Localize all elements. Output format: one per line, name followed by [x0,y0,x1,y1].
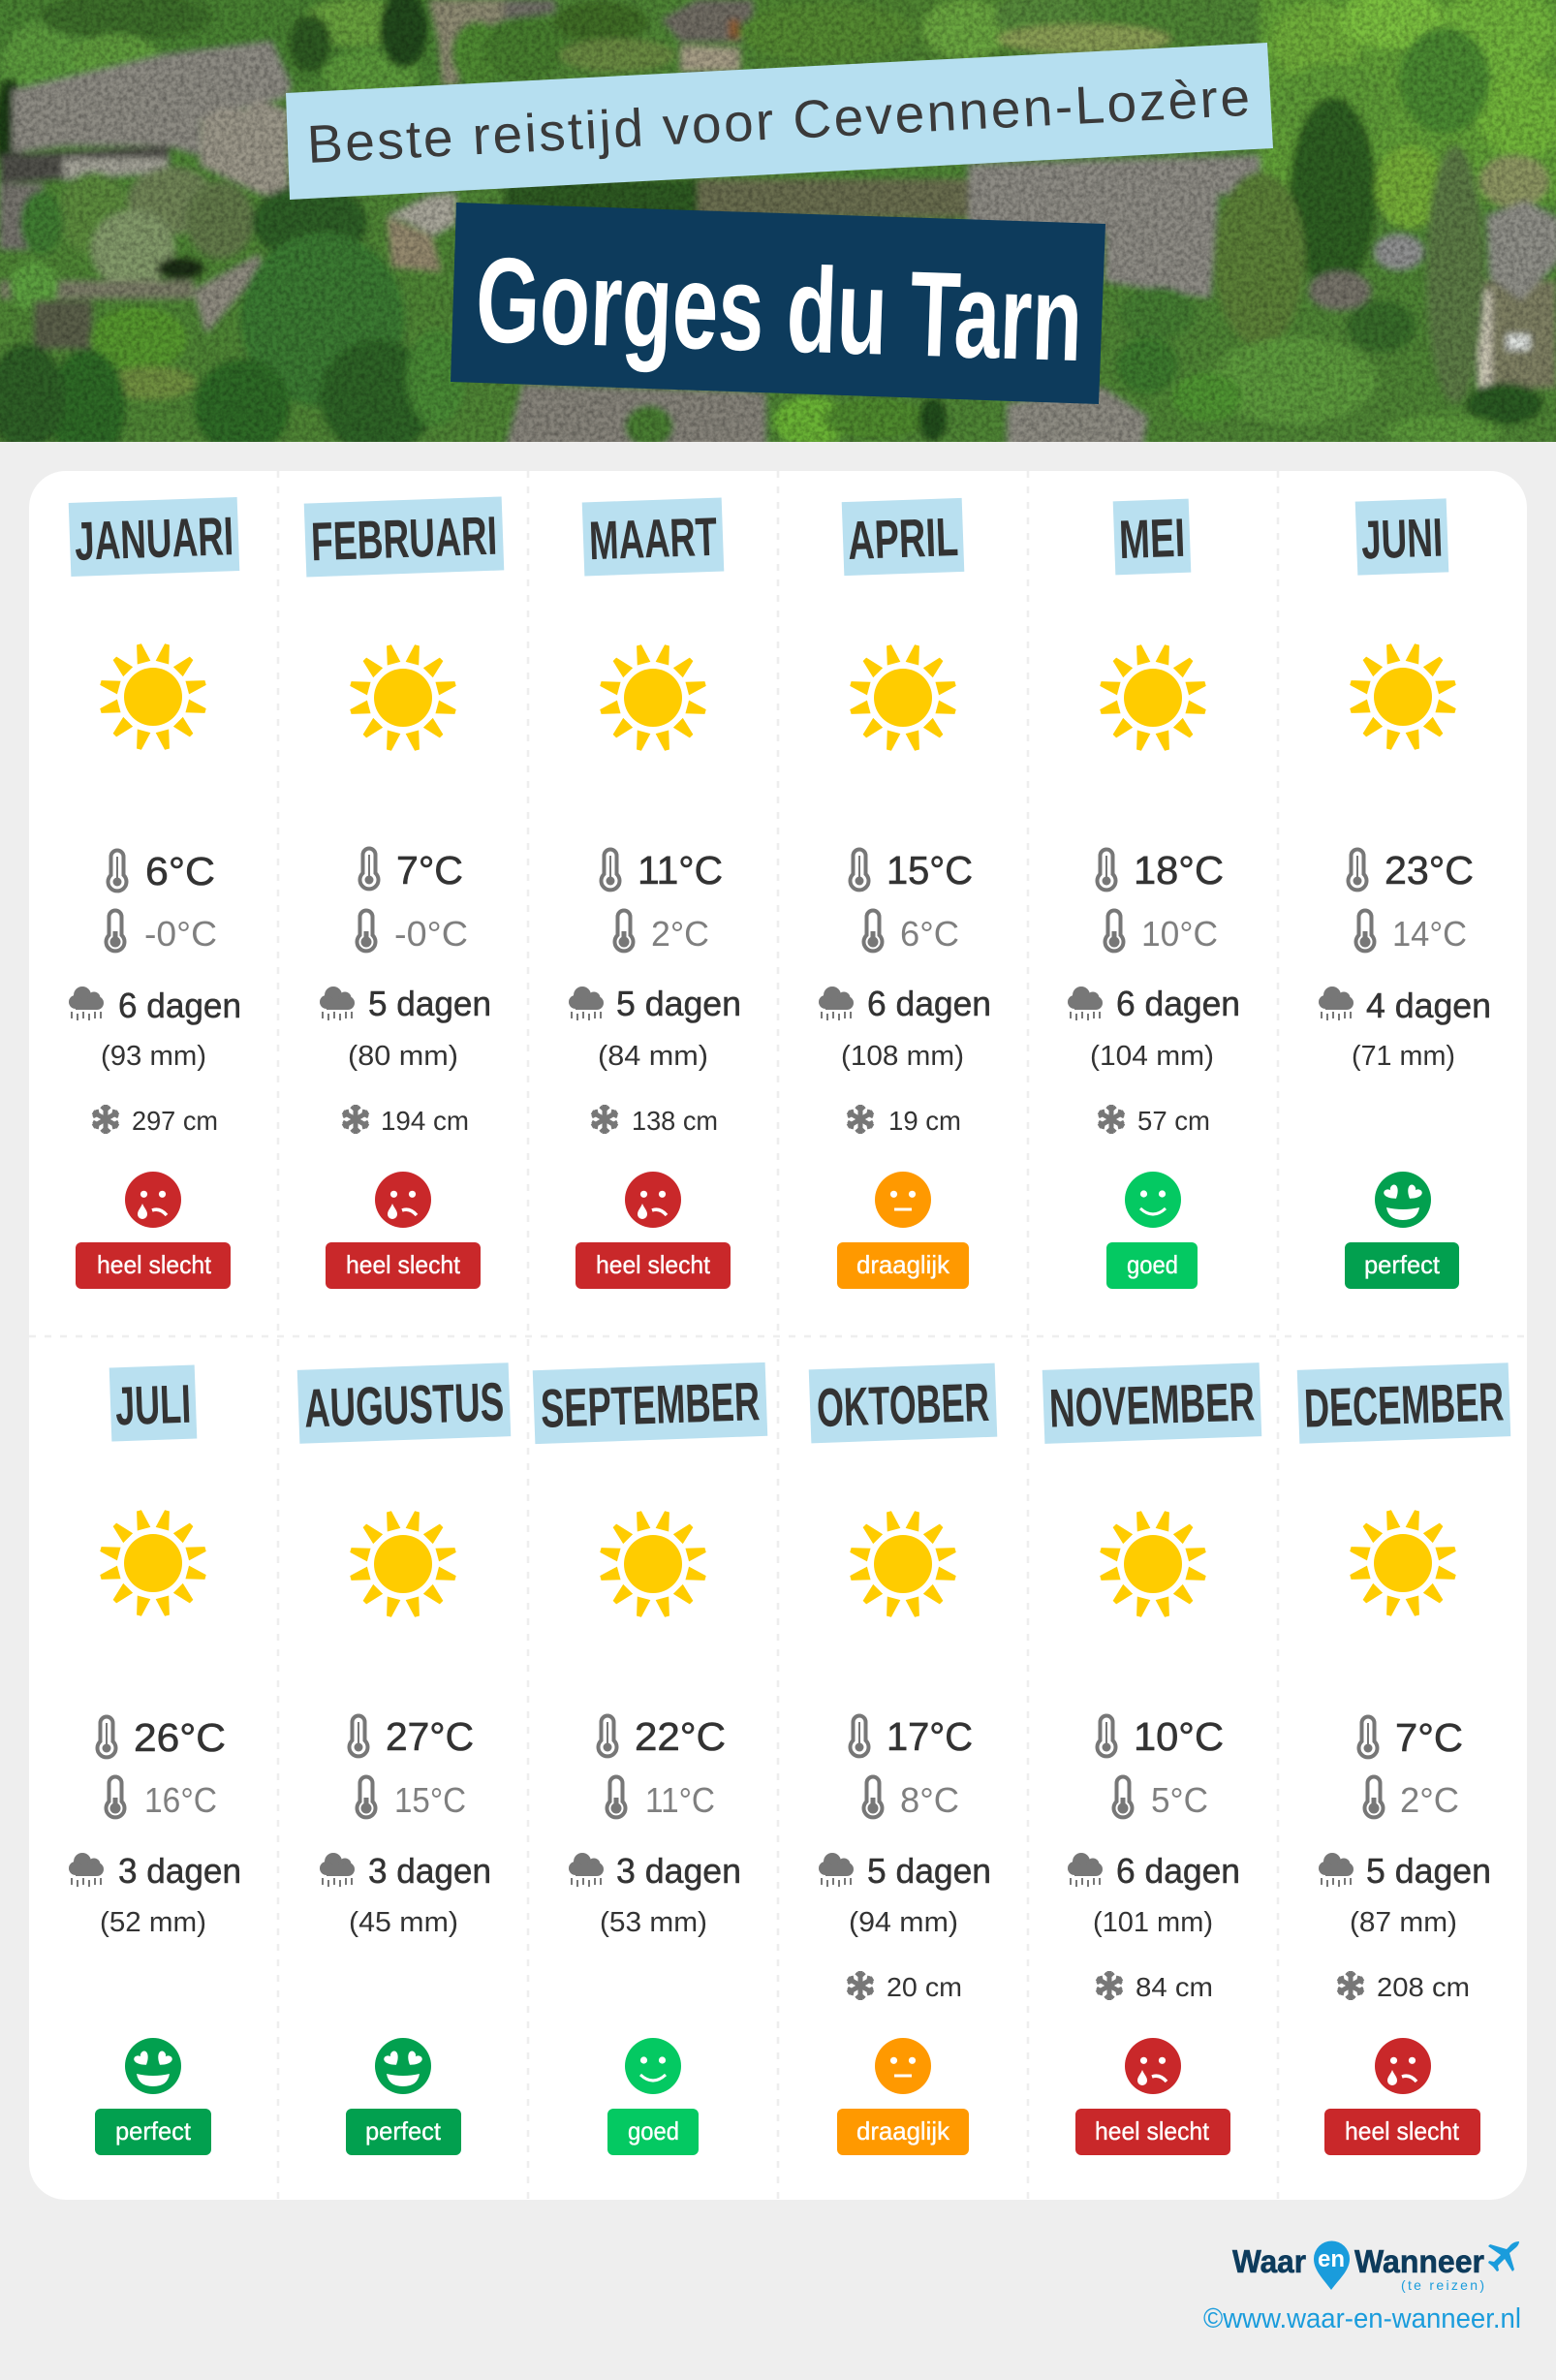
rating badge: perfect [1364,1250,1441,1279]
snowfall [1097,1971,1213,2002]
hero photo: Gorges du Tarn [0,0,1556,465]
snowfall [1099,1105,1210,1136]
rating badge [346,2109,461,2155]
logo: Waar en Wanneer: Waar [1232,2243,1306,2279]
month label: april [842,498,964,576]
rating badge [837,1242,969,1289]
rain days: 3 dagen [368,1851,491,1891]
minimum temperature [107,911,217,954]
month label: juni: JUNI [1360,507,1444,570]
icon: sun [349,1510,457,1618]
rating badge [1075,2109,1230,2155]
rating badge [1324,2109,1480,2155]
rainfall: (108 mm) [841,1041,964,1072]
minimum temperature: 15°C [394,1780,466,1820]
rating badge: perfect [365,2116,442,2145]
minimum temperature: 6°C [900,914,959,954]
rating badge: perfect [115,2116,192,2145]
maximum temperature [109,849,215,893]
minimum temperature [864,1777,959,1820]
subtitle banner [286,43,1273,200]
panel: juni [1319,498,1491,1289]
rain days: 5 dagen [867,1851,991,1891]
panel: november [1043,1362,1261,2155]
title banner [451,203,1105,404]
title banner: Gorges du Tarn [474,233,1084,387]
rating badge: draaglijk [856,1250,950,1279]
rainfall: (71 mm) [1352,1041,1455,1072]
rain days: 3 dagen [118,1851,241,1891]
website credit: ©www.waar-en-wanneer.nl [1203,2303,1521,2334]
rain days: 6 dagen [1116,1851,1240,1891]
month label: mei [1113,499,1191,575]
icon: rating face [375,1172,431,1228]
rain days: 6 dagen [867,984,991,1023]
icon: rating face [1125,2038,1181,2094]
maximum temperature: 7°C [1395,1715,1463,1760]
rating badge: heel slecht [596,1250,711,1279]
icon: sun [99,642,207,751]
icon: sun [599,643,707,752]
rain days: 4 dagen [1366,986,1491,1025]
rating badge [576,1242,731,1289]
snowfall [592,1105,718,1136]
rain days: 5 dagen [616,984,741,1023]
maximum temperature: 10°C [1134,1714,1224,1759]
maximum temperature: 7°C [396,848,463,892]
month label: oktober [809,1363,997,1443]
minimum temperature: 2°C [651,914,709,954]
icon: rating face [125,1172,181,1228]
rating badge: goed [1127,1250,1178,1279]
icon: sun [849,643,957,752]
panel: juli [69,1364,241,2155]
maximum temperature [601,848,723,892]
maximum temperature [851,848,973,892]
rating badge [95,2109,211,2155]
rating badge [607,2109,699,2155]
rating badge: heel slecht [97,1250,212,1279]
rating badge: heel slecht [1345,2116,1460,2145]
icon: sun [1099,1510,1207,1618]
minimum temperature [357,911,468,954]
panel: april [819,498,991,1289]
maximum temperature: 22°C [635,1714,726,1759]
maximum temperature [599,1714,726,1759]
minimum temperature: 2°C [1400,1780,1459,1820]
logo: Waar en Wanneer: (te reizen) [1401,2277,1484,2293]
maximum temperature: 26°C [134,1715,226,1760]
rating badge [1345,1242,1459,1289]
month label: november: NOVEMBER [1048,1370,1256,1439]
rain days: 6 dagen [1116,984,1240,1023]
icon: rating face [1375,2038,1431,2094]
rating badge [76,1242,231,1289]
rating badge: heel slecht [346,1250,461,1279]
rainfall: (53 mm) [600,1907,707,1938]
icon: rating face [625,1172,681,1228]
snowfall: 194 cm [381,1106,469,1136]
minimum temperature [1114,1777,1208,1820]
icon: rating face [375,2038,431,2094]
month label: juli: JULI [114,1373,192,1436]
maximum temperature: 18°C [1134,848,1224,892]
snowfall [1338,1971,1470,2002]
minimum temperature: 10°C [1141,914,1218,954]
month label: mei: MEI [1118,507,1186,570]
rainfall: (94 mm) [849,1907,958,1938]
rating badge [837,2109,969,2155]
minimum temperature: -0°C [144,914,217,954]
icon: sun [1349,642,1457,751]
rainfall: (93 mm) [101,1041,206,1072]
snowfall: 208 cm [1377,1972,1470,2002]
month label: augustus [297,1362,511,1444]
maximum temperature [1358,1715,1463,1760]
month label: januari [69,497,239,577]
minimum temperature [1105,911,1218,954]
icon: rating face [875,1172,931,1228]
month label: maart [582,498,724,576]
maximum temperature: 6°C [145,849,215,893]
minimum temperature: 16°C [144,1780,217,1820]
rain days: 5 dagen [368,984,491,1023]
snowfall [848,1105,961,1136]
panel: maart [569,498,741,1289]
minimum temperature [1356,911,1467,954]
icon: sun [1099,643,1207,752]
icon: rating face [625,2038,681,2094]
minimum temperature [607,1777,715,1820]
panel: climate table card [29,471,1527,2200]
snowfall: 297 cm [132,1106,218,1136]
panel: januari [69,497,241,1289]
rainfall: (87 mm) [1350,1907,1457,1938]
rating badge [1106,1242,1198,1289]
month label: februari: FEBRUARI [310,505,498,572]
icon: sun [349,643,457,752]
rain days: 6 dagen [118,986,241,1025]
snowfall: 57 cm [1137,1106,1210,1136]
panel: oktober [809,1363,997,2155]
maximum temperature [97,1715,226,1760]
snowfall [93,1105,218,1136]
month label: oktober: OKTOBER [816,1371,990,1438]
snowfall: 19 cm [888,1106,961,1136]
month label: februari [304,496,504,578]
minimum temperature: 5°C [1151,1780,1208,1820]
month label: augustus: AUGUSTUS [303,1370,505,1439]
snowfall: 84 cm [1136,1972,1213,2002]
rainfall: (84 mm) [598,1041,708,1072]
minimum temperature [1364,1777,1459,1820]
panel: februari [304,496,504,1289]
icon: rating face [875,2038,931,2094]
minimum temperature: 8°C [900,1780,959,1820]
rainfall: (52 mm) [100,1907,206,1938]
maximum temperature: 15°C [887,848,973,892]
icon: sun [1349,1509,1457,1617]
rating badge: goed [628,2116,679,2145]
icon: sun [849,1510,957,1618]
subtitle banner: Beste reistijd voor Cevennen-Lozère [305,67,1251,174]
snowfall [848,1971,962,2002]
rainfall: (45 mm) [349,1907,458,1938]
icon: sun [99,1509,207,1617]
panel: augustus [297,1362,511,2155]
rating badge: draaglijk [856,2116,950,2145]
snowfall [343,1105,469,1136]
minimum temperature: 11°C [645,1780,715,1820]
rainfall: (101 mm) [1093,1907,1213,1938]
icon: rating face [1375,1172,1431,1228]
minimum temperature [864,911,959,954]
month label: maart: MAART [588,506,718,571]
snowfall: 138 cm [632,1106,718,1136]
rain days: 3 dagen [616,1851,741,1891]
minimum temperature [614,911,709,954]
maximum temperature: 23°C [1385,848,1474,892]
panel: mei [1068,499,1240,1289]
maximum temperature: 11°C [638,848,723,892]
month label: juni [1355,498,1448,576]
maximum temperature: 27°C [386,1714,474,1759]
month label: september [533,1362,767,1444]
rainfall: (80 mm) [348,1041,458,1072]
month label: september: SEPTEMBER [540,1370,761,1439]
logo: Waar en Wanneer: Wanneer [1354,2243,1484,2279]
icon: rating face [125,2038,181,2094]
icon: rating face [1125,1172,1181,1228]
snowfall: 20 cm [887,1972,962,2002]
minimum temperature: 14°C [1392,914,1467,954]
minimum temperature [357,1777,466,1820]
month label: november [1043,1362,1261,1444]
panel: september [533,1362,767,2155]
month label: januari: JANUARI [74,505,234,572]
maximum temperature: 17°C [887,1714,973,1759]
rainfall: (104 mm) [1090,1041,1214,1072]
month label: juli [109,1364,197,1442]
icon: airplane [1488,2241,1519,2271]
rating badge [326,1242,481,1289]
month label: april: APRIL [847,506,959,571]
rating badge: heel slecht [1095,2116,1210,2145]
logo: Waar en Wanneer [1232,2240,1519,2293]
icon: sun [599,1510,707,1618]
maximum temperature [360,848,463,892]
icon: map pin [1314,2240,1350,2290]
rain days: 5 dagen [1366,1851,1491,1891]
maximum temperature [851,1714,973,1759]
icon: map pin: en [1318,2246,1345,2272]
panel: december [1297,1362,1510,2155]
minimum temperature: -0°C [394,914,468,954]
minimum temperature [107,1777,217,1820]
